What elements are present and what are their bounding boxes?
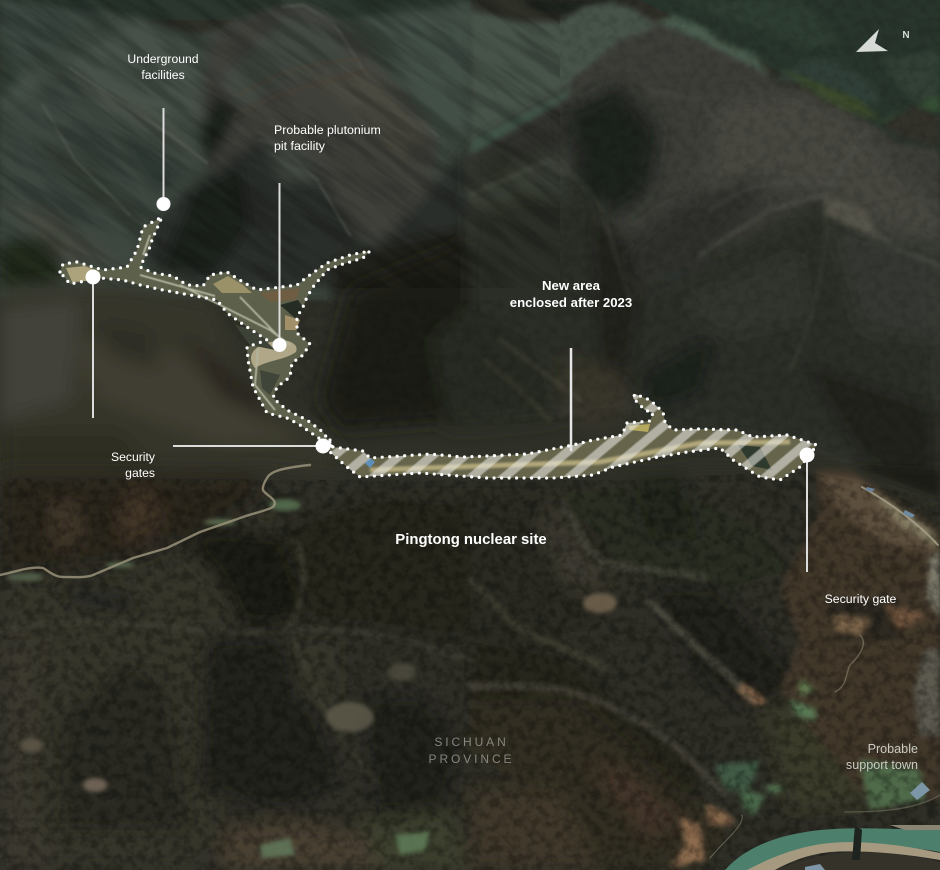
dotted boundary: Pingtong site xyxy=(60,217,817,480)
upper streak texture xyxy=(0,0,560,288)
label: Pingtong nuclear site: Pingtong nuclear site xyxy=(395,532,547,548)
label: probable support town: Probable xyxy=(868,742,918,756)
label: security gates: gates xyxy=(125,466,155,480)
southern slopes xyxy=(0,470,940,870)
upper right fine texture xyxy=(560,14,872,232)
lower forest texture xyxy=(0,471,940,870)
left massif xyxy=(0,0,470,300)
label: new area enclosed after 2023: enclosed after 2023 xyxy=(510,295,632,310)
label: new area enclosed after 2023: New area xyxy=(542,278,600,293)
label: probable plutonium pit facility: pit facility xyxy=(274,139,326,153)
leader line: central security gate xyxy=(173,438,330,454)
label: Sichuan Province: PROVINCE xyxy=(429,752,514,766)
lit ridgelines, upper xyxy=(43,5,437,235)
south-east valley and slopes xyxy=(670,465,940,868)
ridges, lower xyxy=(0,503,763,793)
leader line: plutonium pit facility xyxy=(272,183,286,352)
lower left slope xyxy=(0,284,340,480)
label: security gates: Security xyxy=(111,450,155,464)
town buildings xyxy=(865,487,930,800)
label: probable support town: support town xyxy=(846,758,918,772)
clearings and fields xyxy=(7,499,617,858)
back ranges, dark green xyxy=(0,0,940,170)
label: underground facilities: facilities xyxy=(141,68,185,82)
central and eastern massif xyxy=(470,2,940,500)
site zone: west valley xyxy=(60,217,370,447)
label: Sichuan Province: SICHUAN xyxy=(434,735,509,749)
roads xyxy=(0,465,940,858)
label: probable plutonium pit facility: Probable plutonium xyxy=(274,123,381,137)
river xyxy=(725,825,940,870)
leader line: new area xyxy=(570,348,572,451)
label: underground facilities: Underground xyxy=(127,52,199,66)
leader line: east security gate xyxy=(800,448,814,572)
label: security gate: Security gate xyxy=(825,592,897,606)
north arrow: N xyxy=(902,30,910,41)
leader line: underground facilities xyxy=(156,108,170,211)
site zone: new area east with hatching xyxy=(330,394,817,480)
leader line: west security gate xyxy=(86,270,100,418)
north arrow xyxy=(856,29,910,52)
